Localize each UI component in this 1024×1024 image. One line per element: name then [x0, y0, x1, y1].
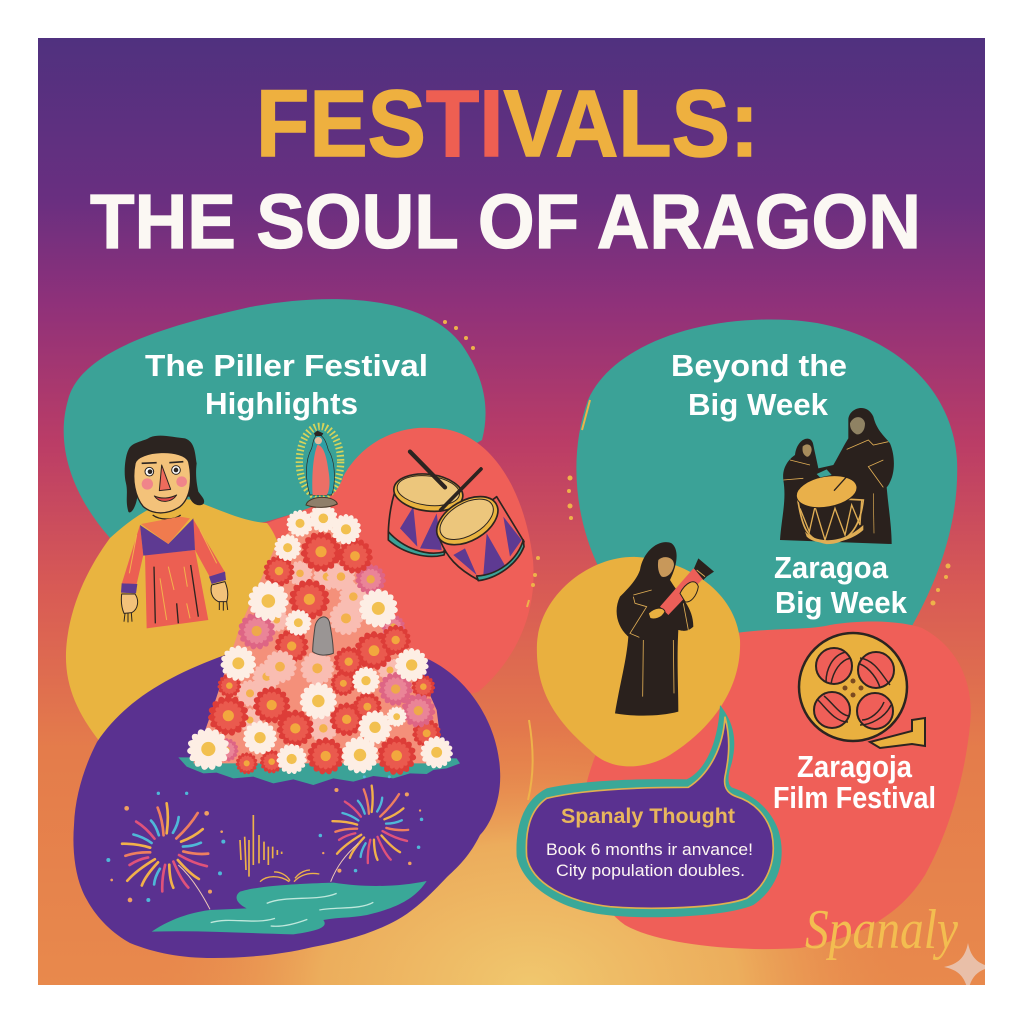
- callout: Spanaly Thought: [516, 705, 782, 917]
- blob: teal left: [64, 299, 486, 538]
- icon: drums: [388, 452, 524, 581]
- Virgin statue: [299, 426, 341, 507]
- heading: The Piller Festival Highlights: [145, 348, 428, 421]
- decorative dots: [443, 320, 950, 800]
- blob: teal right: [576, 319, 957, 640]
- icon: figure holding telescope: [615, 542, 714, 716]
- small grey figure: [313, 617, 333, 655]
- icon: firework trails and sound burst: [178, 815, 358, 909]
- blob: coral left: [267, 428, 534, 720]
- icon: sparkle: [944, 943, 985, 985]
- icon: film reel: [799, 633, 925, 748]
- title: [90, 71, 921, 265]
- green base of flower mound: [178, 757, 460, 785]
- flower pile: [187, 504, 453, 776]
- heading: The Piller Festival Highlights: Highlights: [205, 386, 358, 421]
- callout heading: Spanaly Thought: [561, 805, 735, 828]
- label: Zaragoa Big Week: [774, 550, 908, 620]
- icon: flower mound: [178, 426, 460, 785]
- heading: The Piller Festival Highlights: The Piller Festival: [145, 348, 428, 383]
- title line: Festivals: FESTIVALS:: [256, 71, 759, 177]
- blob: yellow right: [537, 557, 740, 766]
- icon: water pool: [152, 881, 427, 934]
- heading: Beyond the Big Week: Beyond the: [671, 348, 847, 383]
- label: Zaragoja Film Festival: Film Festival: [773, 780, 936, 815]
- icon: right fireworks: [319, 775, 423, 873]
- panel: Beyond the Big Week: [537, 319, 971, 949]
- title line: The Soul of Aragon: THE SOUL OF ARAGON: [90, 179, 921, 265]
- signature: Spanaly: Spanaly: [805, 899, 958, 961]
- icon: two figures with drum: [780, 408, 894, 544]
- callout body text: Book 6 months ir anvance!: [546, 840, 753, 859]
- label: Zaragoja Film Festival: [773, 749, 936, 815]
- icon: left fireworks: [106, 792, 225, 902]
- heading: Beyond the Big Week: [671, 348, 847, 422]
- heading: Beyond the Big Week: Big Week: [688, 387, 829, 422]
- panel: The Piller Festival Highlights: [64, 299, 534, 958]
- label: Zaragoa Big Week: Zaragoa: [774, 550, 889, 585]
- label: Zaragoja Film Festival: Zaragoja: [797, 749, 913, 784]
- icon: giant figure: [121, 436, 228, 628]
- callout bubble: [516, 705, 782, 917]
- blob: yellow left: [66, 499, 290, 742]
- blob: coral right: [582, 622, 971, 949]
- callout body text: [546, 840, 753, 880]
- label: Zaragoa Big Week: Big Week: [775, 585, 908, 620]
- blob: purple left: [73, 644, 500, 958]
- callout body text: City population doubles.: [556, 861, 745, 880]
